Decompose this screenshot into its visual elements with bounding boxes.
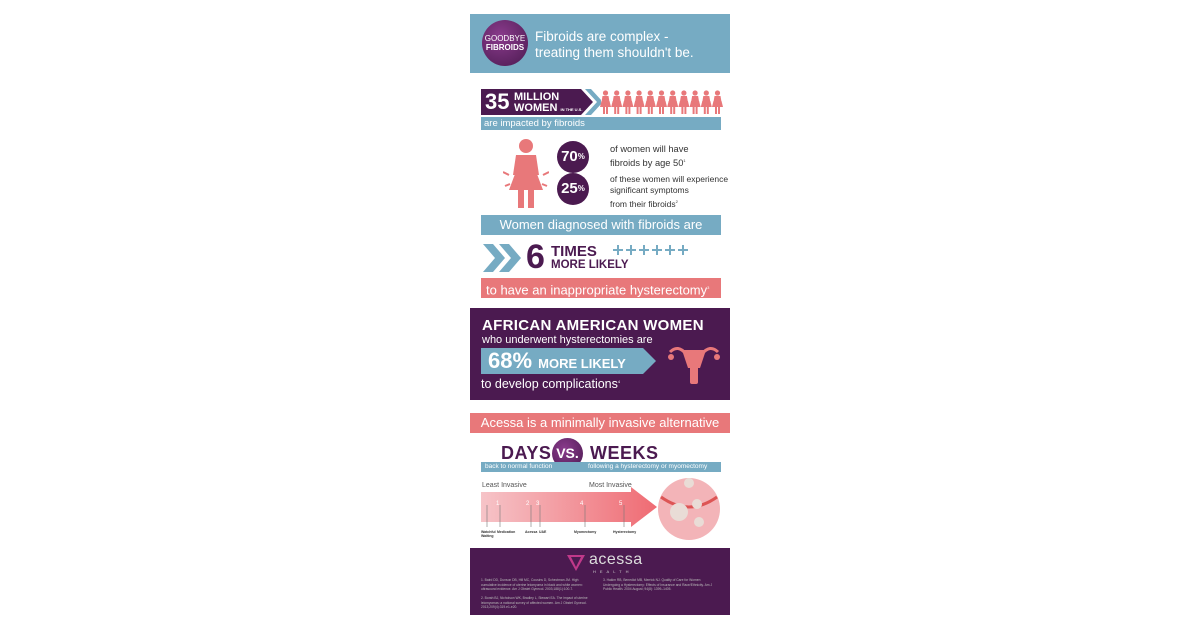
invasiveness scale: Acessa xyxy=(525,530,537,534)
stat: 35 million women: WOMEN IN THE U.S. xyxy=(514,102,582,114)
days vs weeks xyxy=(481,438,721,472)
invasiveness scale xyxy=(481,482,657,538)
stat: 25%: significant symptoms xyxy=(610,185,689,195)
stat: 6 times more likely: MORE LIKELY xyxy=(551,259,629,271)
stat: 25%: of these women will experience xyxy=(610,174,728,184)
references: 1. Baird DD, Dunson DB, Hill MC, Cousins D, Schectman JM. High cumulative incidence of uterine leiomyoma in black and white women: ultrasound evidence. Am J Obstet Gynecol. 2003;188(1):100-7. xyxy=(481,578,583,591)
invasiveness scale: Most Invasive xyxy=(589,482,632,489)
invasiveness scale: Medication xyxy=(497,530,515,534)
stat: 6 times more likely: TIMES xyxy=(551,243,597,260)
stat: 35 million women: MILLION xyxy=(514,91,559,103)
stat: 6 times more likely: 6 xyxy=(526,238,545,276)
footer panel: 3. Hakim RB, Benedict MB, Merrick NJ. Quality of Care for Women Undergoing a Hysterectomy: Effects of Insurance and Race/Ethnicity. Am J Public Health. 2004 August; 94(8): 1399–1405. xyxy=(603,578,712,591)
stat: 70% xyxy=(557,141,689,173)
blue bar text: are impacted by fibroids xyxy=(484,118,585,129)
acessa logo: HEALTH xyxy=(593,569,632,574)
invasiveness scale: Hysterectomy xyxy=(613,530,636,534)
gradient arrow: 4 xyxy=(580,501,584,507)
logo: goodbye fibroids xyxy=(482,20,528,66)
panel: african american women: to develop complications4 xyxy=(481,377,620,391)
icon: uterus xyxy=(668,347,720,384)
stat: 70%: 70% xyxy=(561,148,585,165)
header title: Fibroids are complex - xyxy=(535,29,669,44)
blue arrow: 68% more likely xyxy=(481,348,656,374)
blue bar: women diagnosed: Women diagnosed with fibroids are xyxy=(500,217,702,232)
gradient arrow: 2 xyxy=(526,501,530,507)
pink bar: hysterectomy: to have an inappropriate hysterectomy3 xyxy=(486,282,709,297)
stat: 35 million women xyxy=(481,89,723,130)
gradient arrow xyxy=(481,487,657,527)
header title: treating them shouldn't be. xyxy=(535,45,694,60)
panel: african american women: 68% MORE LIKELY xyxy=(488,348,626,373)
invasiveness scale: Waiting xyxy=(481,534,494,538)
icon: chevrons xyxy=(483,244,521,272)
pink bar: hysterectomy xyxy=(481,278,721,298)
days vs weeks: WEEKS xyxy=(590,443,659,463)
vs circle: VS. xyxy=(556,445,579,461)
days vs weeks: DAYS xyxy=(501,443,551,463)
plus signs xyxy=(613,245,688,255)
logo: goodbye fibroids: FIBROIDS xyxy=(486,43,524,52)
blue bar captions: following a hysterectomy or myomectomy xyxy=(588,463,707,470)
logo: goodbye fibroids: GOODBYE xyxy=(485,34,525,43)
panel: african american women: AFRICAN AMERICAN WOMEN xyxy=(482,317,704,334)
stat: 25% xyxy=(557,173,728,209)
icon: woman in pain xyxy=(503,139,549,208)
acessa logo xyxy=(567,551,643,574)
blue bar captions: back to normal function xyxy=(485,463,552,470)
icons: women xyxy=(600,90,723,114)
blue bar text xyxy=(481,117,721,130)
invasiveness scale: Watchful xyxy=(481,530,496,534)
panel: african american women xyxy=(470,308,730,400)
blue bar: women diagnosed xyxy=(481,215,721,235)
panel: african american women: who underwent hysterectomies are xyxy=(482,334,653,346)
invasiveness scale: Least Invasive xyxy=(482,482,527,489)
blue bar captions xyxy=(481,462,721,472)
pink bar: acessa xyxy=(470,413,730,433)
stat: 25%: from their fibroids2 xyxy=(610,199,678,209)
purple arrow banner xyxy=(481,89,601,115)
references xyxy=(481,578,588,609)
stat: 70%: fibroids by age 501 xyxy=(610,158,686,168)
acessa logo: acessa xyxy=(589,551,643,568)
invasiveness scale: UAE xyxy=(539,530,546,534)
gradient arrow: 3 xyxy=(536,501,540,507)
header title xyxy=(535,29,694,60)
vs circle xyxy=(552,438,583,469)
invasiveness scale: Myomectomy xyxy=(574,530,596,534)
header panel xyxy=(470,14,730,73)
stat: 25%: 25% xyxy=(561,180,585,197)
stat: 35 million women: 35 xyxy=(485,89,509,114)
stat: 70%: of women will have xyxy=(610,144,689,154)
stat: 6 times more likely xyxy=(483,238,688,276)
gradient arrow: 5 xyxy=(619,501,623,507)
references: 2. Borah BJ, Nicholson WK, Bradley L, Stewart EA. The impact of uterine leiomyomas: a national survey of affected women. Am J Obstet Gynecol. 2013;209(4):319.e1-e20. xyxy=(481,596,588,609)
image: uterus illustration xyxy=(658,478,720,540)
pink bar: acessa: Acessa is a minimally invasive alternative xyxy=(481,415,719,430)
gradient arrow: 1 xyxy=(496,501,500,507)
footer panel xyxy=(470,548,730,615)
